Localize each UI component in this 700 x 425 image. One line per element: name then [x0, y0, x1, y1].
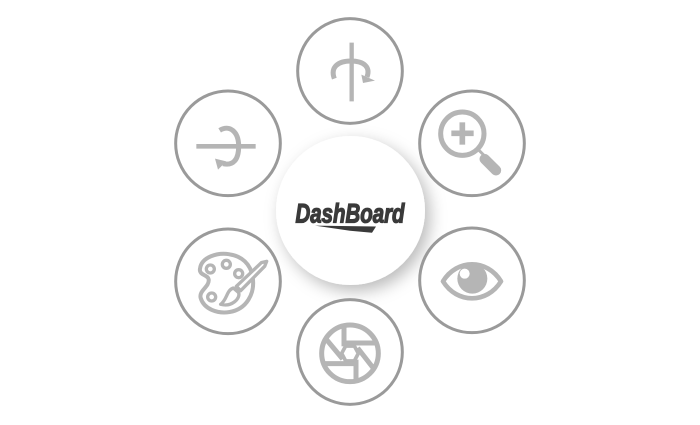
- icon: vertical axis with rotation arrow: [333, 43, 375, 101]
- logo wordmark: DashBoard: [296, 198, 405, 228]
- icon: paint palette and brush: [200, 254, 267, 312]
- top node: vertical axis rotation: [298, 19, 402, 123]
- bottom-right node: visibility: [420, 228, 524, 333]
- top-left node: horizontal axis rotation: [176, 91, 280, 196]
- top-right node: zoom in: [420, 91, 524, 196]
- logo swoosh: [315, 226, 376, 233]
- icon: eye: [443, 264, 501, 298]
- bottom node: aperture: [298, 300, 402, 404]
- bottom-left node: palette: [176, 229, 280, 334]
- icon: horizontal axis with rotation arrow: [196, 128, 256, 170]
- icon: magnifying glass with plus: [441, 112, 496, 170]
- icon: camera shutter: [322, 325, 378, 382]
- center hub: DashBoard logo: [276, 136, 425, 285]
